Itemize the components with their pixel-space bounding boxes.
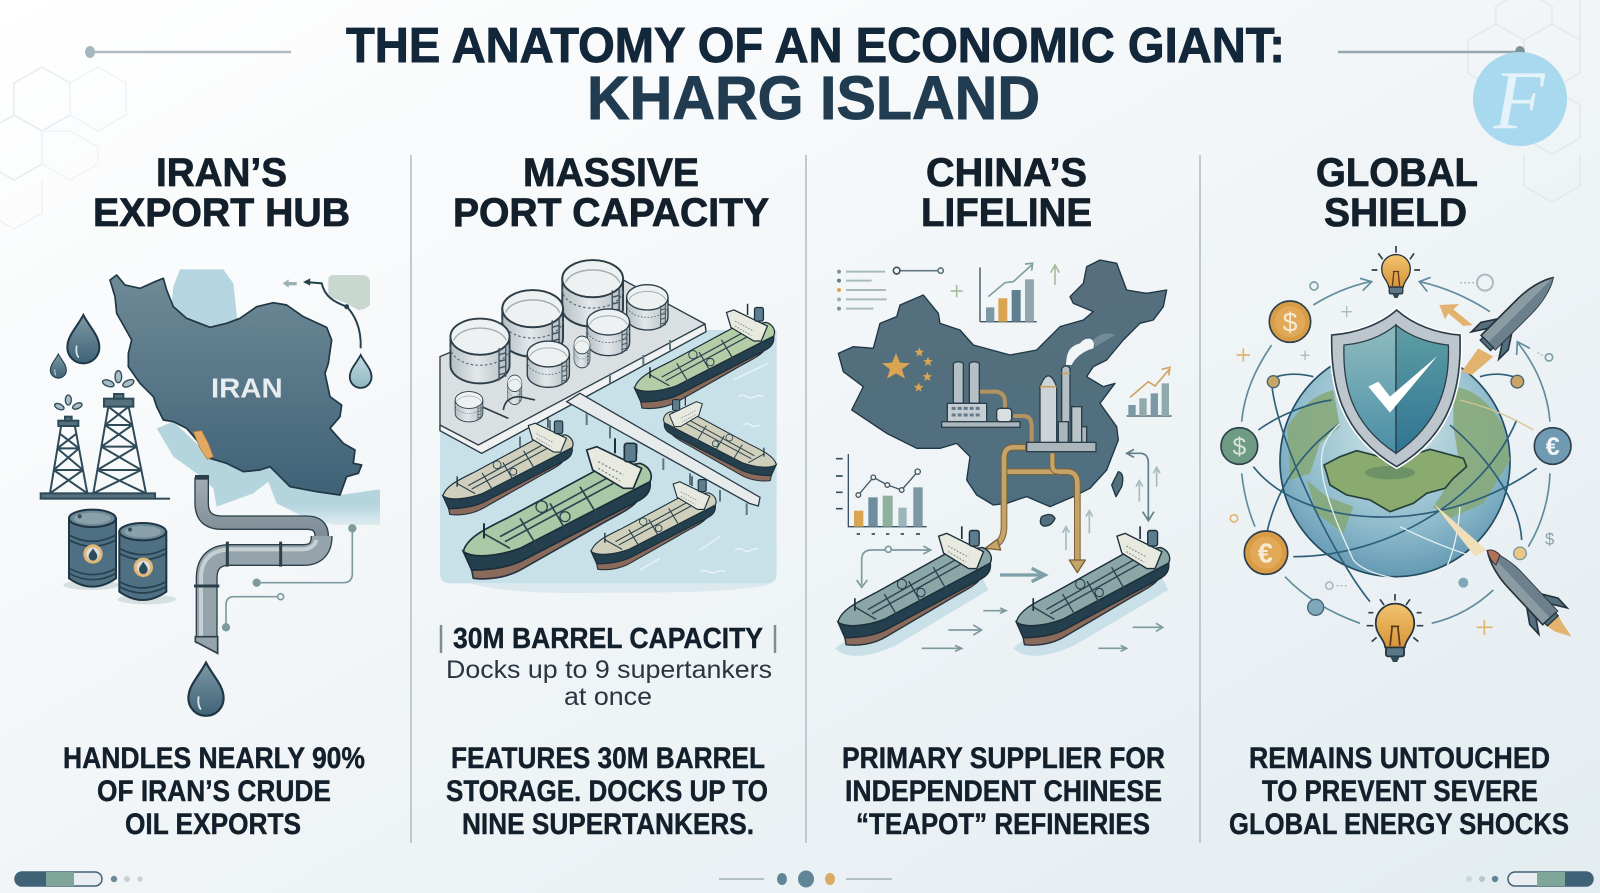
- pipe outlet: [195, 637, 218, 653]
- caption: Iran: [63, 742, 365, 841]
- map: Iran: [110, 275, 362, 495]
- caption: China: “TEAPOT” REFINERIES: [856, 808, 1150, 841]
- refinery: [942, 362, 1096, 452]
- icon: oil barrels: [63, 510, 176, 604]
- heading: China's lifeline: CHINA’S: [926, 151, 1087, 195]
- water shadow: [470, 583, 773, 593]
- storage platform: [440, 280, 706, 453]
- storage tanks: [450, 260, 668, 422]
- tanker ships: [838, 526, 1170, 645]
- water: [440, 330, 777, 583]
- heading: massive port capacity: [453, 151, 769, 235]
- smoke: [1066, 339, 1094, 365]
- caption: Iran: OIL EXPORTS: [125, 808, 301, 841]
- illustration: China map, refinery, tankers, charts: [835, 260, 1172, 656]
- caption: Iran: HANDLES NEARLY 90%: [63, 742, 365, 775]
- logo watermark: F: [1492, 54, 1546, 147]
- footer pagination: centre: [719, 870, 892, 888]
- heading: China's lifeline: LIFELINE: [921, 191, 1092, 235]
- hexagon pattern: top right: [1468, 0, 1580, 202]
- illustration: Iran map, derricks, barrels, pipeline: [41, 269, 380, 716]
- heading: China's lifeline: [921, 151, 1092, 235]
- caption: China: [842, 742, 1165, 841]
- coin: orange euro: [1244, 531, 1288, 574]
- Persian Gulf water: [157, 422, 380, 525]
- heading: massive port capacity: MASSIVE: [523, 151, 699, 195]
- pipeline: [194, 477, 322, 643]
- coin: blue euro: [1534, 428, 1571, 464]
- rocket: bottom right: [1473, 538, 1567, 634]
- caption: China: INDEPENDENT CHINESE: [845, 775, 1162, 808]
- rocket trail: bottom: [1433, 503, 1487, 557]
- stat callout: 30M barrel capacity: 30M BARREL CAPACITY: [453, 623, 763, 655]
- rocket: top right: [1471, 264, 1567, 359]
- Kharg highlight: [193, 431, 213, 459]
- illustration: port with tanks and supertankers: [440, 260, 777, 593]
- coin: green dollar: [1221, 428, 1258, 464]
- circuit lines: [223, 525, 356, 631]
- water north of Iran: [172, 269, 237, 328]
- rocket flame: top: [1462, 348, 1493, 375]
- caption: port: FEATURES 30M BARREL: [451, 742, 765, 775]
- supertankers: [443, 304, 776, 579]
- heading: Iran's export hub: EXPORT HUB: [93, 191, 350, 235]
- nodes and small marks: [1230, 275, 1553, 635]
- caption: global: TO PREVENT SEVERE: [1262, 775, 1538, 808]
- map: China: [838, 260, 1167, 526]
- caption: Iran: OF IRAN’S CRUDE: [97, 775, 331, 808]
- route line with arrow: [303, 279, 361, 348]
- heading: Iran's export hub: [93, 151, 350, 235]
- heading: global shield: [1316, 151, 1478, 235]
- light orbit paths: [1321, 400, 1533, 602]
- panel: massive port capacity: [440, 151, 777, 841]
- caption: port: STORAGE. DOCKS UP TO: [446, 775, 768, 808]
- icon: oil drops: [50, 315, 372, 716]
- water ripples: [640, 363, 768, 573]
- water wakes: [835, 577, 1168, 656]
- caption: global: REMAINS UNTOUCHED: [1249, 742, 1550, 775]
- stat callout: 30M barrel capacity: [441, 623, 775, 711]
- panel: China's lifeline: [835, 151, 1172, 841]
- hexagon pattern: top left: [0, 67, 126, 229]
- header accent line: left: [85, 46, 291, 58]
- panel: Iran's export hub: [41, 151, 380, 841]
- bar chart: left: [836, 454, 927, 534]
- plus and arrow decorations: [951, 265, 1059, 297]
- flow arrows: [857, 449, 1163, 651]
- footer progress pill: left: [15, 872, 143, 886]
- logo watermark: [1473, 52, 1567, 147]
- caption: port: NINE SUPERTANKERS.: [462, 808, 754, 841]
- flag stars: [882, 347, 933, 392]
- icon: light bulb bottom: [1367, 594, 1423, 662]
- globe: [1280, 347, 1510, 577]
- coin: dollar: $: [1283, 308, 1298, 338]
- heading: global shield: GLOBAL: [1316, 151, 1478, 195]
- caption: China: PRIMARY SUPPLIER FOR: [842, 742, 1165, 775]
- rocket flame: bottom: [1543, 612, 1572, 637]
- map label: IRAN: [211, 372, 283, 403]
- panel: global shield: [1221, 151, 1572, 841]
- orbit paths: [1253, 374, 1537, 602]
- header accent line: right: [1338, 46, 1525, 58]
- caption: port: [446, 742, 768, 841]
- title: THE ANATOMY OF AN ECONOMIC GIANT:: [346, 19, 1285, 73]
- illustration: globe, shield, coins, rockets: [1221, 246, 1572, 662]
- pier: [520, 340, 760, 515]
- title: [346, 19, 1285, 132]
- icon: light bulb top: [1372, 246, 1420, 298]
- neighbouring region: [328, 275, 370, 310]
- small arrow: [283, 279, 297, 288]
- coin: orange euro: €: [1258, 538, 1273, 569]
- small dollar mark: $: [1545, 529, 1554, 548]
- footer progress pill: right: [1466, 872, 1593, 886]
- icon: oil derricks: [41, 371, 170, 499]
- coin: blue euro: €: [1546, 433, 1560, 461]
- outer orbit ring with arrows: [1242, 277, 1550, 623]
- heading: Iran's export hub: IRAN’S: [156, 151, 287, 195]
- heading: global shield: SHIELD: [1324, 191, 1467, 235]
- swoosh arrow: [1439, 304, 1473, 326]
- caption: global: [1229, 742, 1569, 841]
- supply pipes with arrows: [985, 447, 1085, 573]
- bar chart: top: [980, 263, 1037, 322]
- globe land: [1287, 387, 1510, 533]
- island on globe: [1324, 449, 1467, 512]
- heading: massive port capacity: PORT CAPACITY: [453, 191, 769, 235]
- coin: dollar: [1269, 301, 1311, 342]
- stat callout: 30M barrel capacity: Docks up to 9 supertankers: [446, 656, 772, 684]
- stat callout: 30M barrel capacity: at once: [564, 683, 652, 711]
- shield: [1332, 310, 1460, 467]
- title: KHARG ISLAND: [587, 64, 1040, 132]
- column dividers: [411, 155, 1200, 843]
- bar chart: right: [1127, 367, 1172, 416]
- coin: green dollar: $: [1232, 434, 1246, 461]
- legend list: [837, 267, 943, 311]
